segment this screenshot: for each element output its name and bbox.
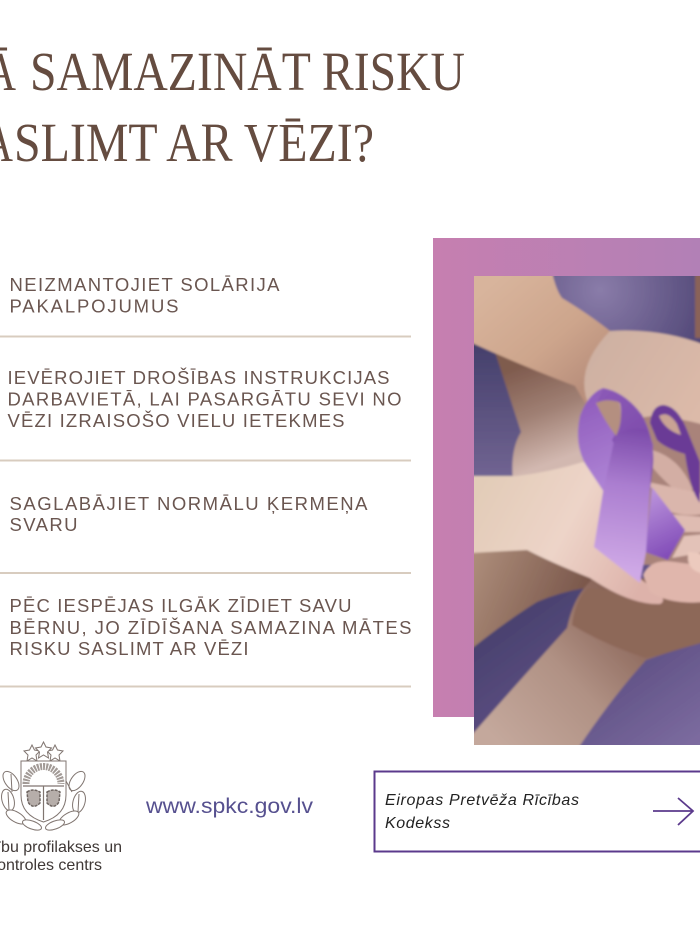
item: body weight: SAGLABĀJIET NORMĀLU ĶERMEŅA — [10, 493, 368, 514]
ribbon left loop — [578, 388, 618, 492]
holding palm — [470, 462, 663, 604]
fingers right — [642, 415, 700, 566]
item: workplace safety: DARBAVIETĀ, LAI PASARGĀTU SEVI NO — [8, 388, 402, 410]
item: workplace safety: IEVĒROJIET DROŠĪBAS INSTRUKCIJAS — [8, 367, 390, 388]
link text: Eiropas Pretvēža Rīcības — [385, 792, 579, 809]
child top arm — [470, 272, 610, 408]
title — [0, 41, 465, 173]
ribbon 2 right — [650, 405, 700, 503]
item: solarium: NEIZMANTOJIET SOLĀRIJA — [10, 274, 280, 295]
item: workplace safety — [8, 367, 402, 431]
arm 2 behind — [495, 352, 592, 480]
item: body weight — [10, 493, 368, 535]
item: workplace safety: VĒZI IZRAISOŠO VIELU IETEKMES — [8, 410, 344, 431]
ribbon right of loop — [596, 388, 653, 490]
shield — [21, 761, 66, 822]
sun rays — [26, 767, 61, 784]
title: SAMAZINĀT RISKU — [30, 41, 465, 102]
item: breastfeeding: RISKU SASLIMT AR VĒZI — [10, 638, 248, 659]
link text: Kodekss — [385, 815, 450, 832]
oak wreath — [0, 769, 88, 832]
lions — [23, 786, 64, 820]
stars — [24, 742, 63, 761]
pink backing panel — [433, 238, 700, 717]
title: SLIMT AR VĒZI? — [14, 112, 374, 173]
item: breastfeeding — [10, 595, 412, 659]
ribbon right tail — [645, 487, 685, 560]
item: solarium: PAKALPOJUMUS — [10, 296, 178, 316]
item: body weight: SVARU — [10, 514, 78, 535]
icon: arrow — [653, 798, 693, 825]
photo: hands holding purple ribbon — [470, 272, 700, 750]
item: solarium — [10, 274, 280, 316]
ribbon main band — [594, 429, 653, 583]
child lower fingers — [643, 561, 700, 603]
item: breastfeeding: PĒC IESPĒJAS ILGĀK ZĪDIET SAVU — [10, 595, 352, 616]
website link: www.spkc.gov.lv — [145, 795, 314, 818]
arm 3 lower left — [474, 549, 592, 649]
adult forearm and hand — [474, 577, 678, 745]
link text — [385, 792, 579, 832]
link box: Europe code — [374, 772, 700, 852]
list of recommendations — [0, 274, 412, 686]
item: breastfeeding: BĒRNU, JO ZĪDĪŠANA SAMAZINA MĀTES — [10, 617, 412, 638]
logo: coat of arms — [0, 742, 88, 832]
ribbon hole shows skin — [596, 400, 621, 436]
organisation name — [0, 839, 122, 874]
